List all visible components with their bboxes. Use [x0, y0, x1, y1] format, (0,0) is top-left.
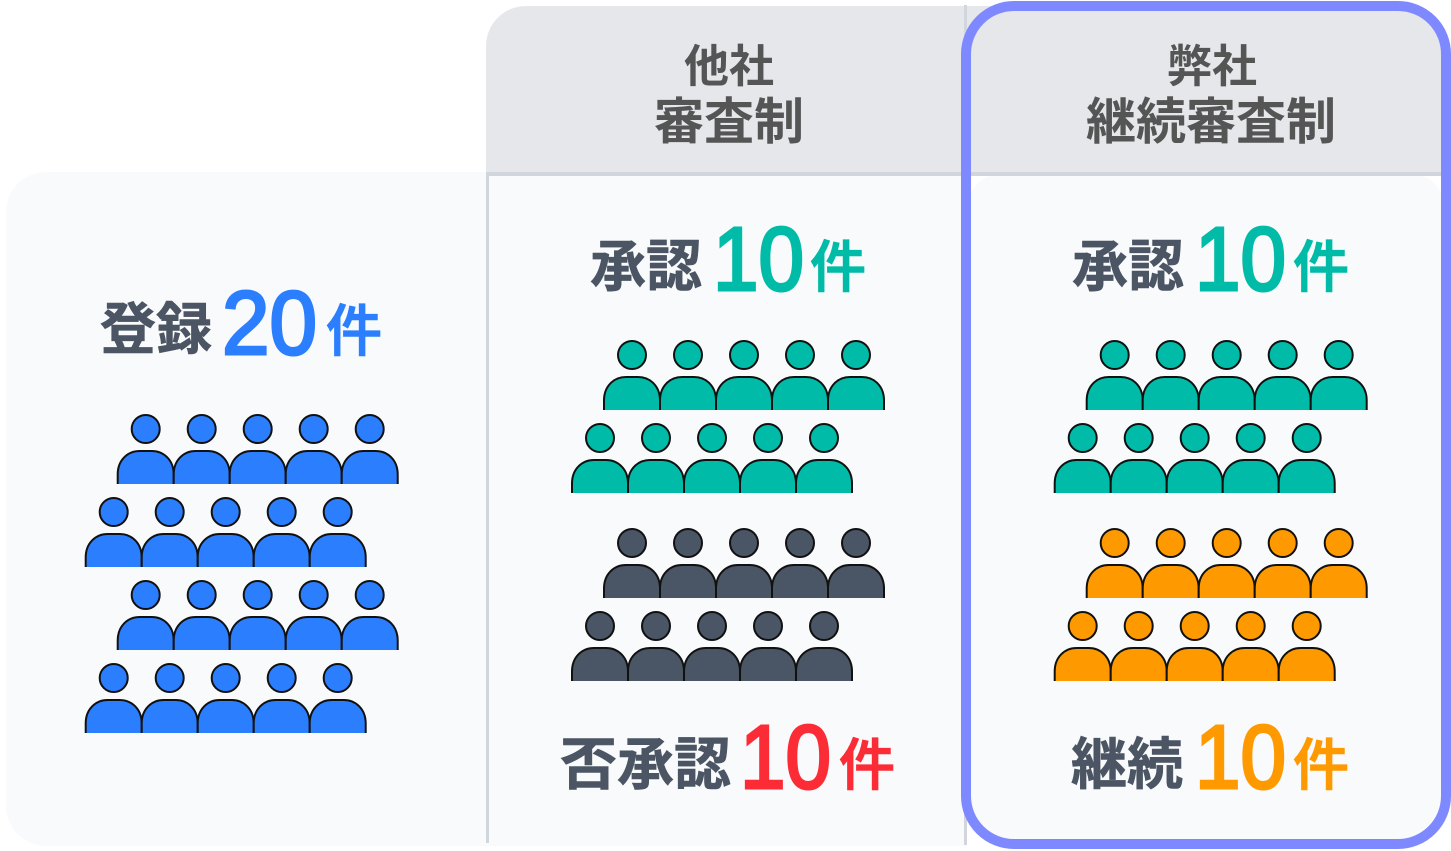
heading: our continuous review — [1086, 41, 1336, 150]
label: approved 10: 件 — [1293, 236, 1349, 299]
panel: our continuous review — [964, 5, 1446, 846]
people: gray 10 — [572, 529, 884, 681]
panel: registered — [6, 172, 486, 846]
people: green 10 — [1055, 341, 1367, 493]
label: continued 10: 件 — [1293, 734, 1349, 797]
label: rejected 10: 件 — [839, 734, 895, 797]
label: rejected 10: 10 — [740, 708, 831, 808]
label: continued 10 — [1071, 708, 1349, 808]
heading: our continuous review: 弊社 — [1167, 41, 1257, 92]
label: rejected 10 — [560, 708, 895, 808]
label: approved 10: 承認 — [590, 235, 702, 298]
label: rejected 10: 否承認 — [560, 733, 731, 797]
label: approved 10: 件 — [810, 236, 866, 299]
panel: other companies — [486, 6, 966, 846]
heading: registered 20 — [100, 274, 382, 374]
highlight frame — [966, 6, 1446, 844]
heading: other companies: 他社 — [684, 41, 774, 92]
label: continued 10: 継続 — [1071, 733, 1183, 796]
label: approved 10 — [590, 210, 866, 310]
heading: registered 20: 件 — [326, 300, 382, 363]
people: green 10 — [572, 341, 884, 493]
heading: registered 20: 20 — [222, 274, 317, 374]
label: approved 10: 10 — [713, 210, 804, 310]
people: orange 10 — [1055, 529, 1367, 681]
heading: other companies: 審査制 — [654, 94, 804, 150]
label: continued 10: 10 — [1195, 708, 1286, 808]
label: approved 10 — [1072, 210, 1349, 310]
heading: our continuous review: 継続審査制 — [1086, 94, 1336, 150]
label: approved 10: 10 — [1195, 210, 1286, 310]
people: blue 20 — [86, 415, 398, 733]
label: approved 10: 承認 — [1072, 235, 1184, 298]
heading: other companies — [654, 41, 804, 150]
heading: registered 20: 登録 — [100, 298, 212, 361]
